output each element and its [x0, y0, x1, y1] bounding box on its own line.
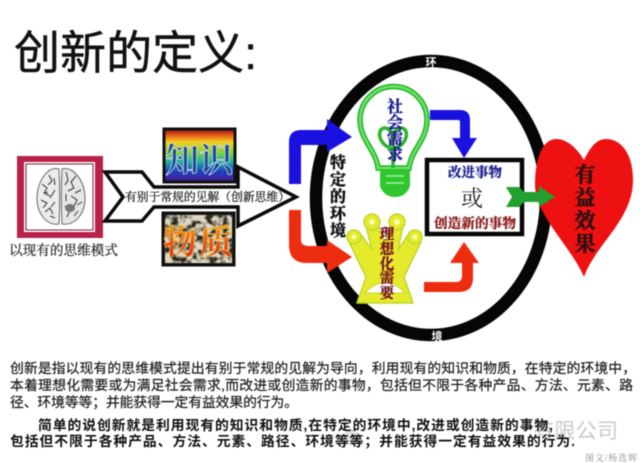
label: idealized need	[380, 226, 396, 302]
arrow: red to outcome box	[424, 242, 479, 292]
text block: simple definition: 简单的说创新就是利用现有的知识和物质,在特定的环境中,改进或创造新的事物,	[38, 417, 553, 433]
label: social demand: 会	[387, 113, 403, 132]
text block: definition: 径、环境等等；并能获得一定有益效果的行为。	[10, 394, 298, 411]
icon: light bulb with social demand	[360, 86, 427, 197]
label: specific environment: 环	[330, 205, 348, 223]
label: social demand: 社	[387, 98, 403, 116]
text block: definition	[10, 360, 636, 411]
panel: knowledge: 知识	[165, 142, 236, 180]
label: idealized need: 要	[380, 285, 395, 302]
label: social demand: 需	[387, 129, 403, 148]
arrow: blue input	[289, 119, 352, 184]
arrow: differentiated insight: 有别于常规的见解（创新思维）	[125, 190, 290, 204]
title: 创新的定义:	[14, 27, 257, 79]
icon: heart with beneficial effect	[535, 139, 633, 277]
text block: definition: 创新是指以现有的思维模式提出有别于常规的见解为导向，利用现有的知识和物质，在特定的环境中，	[10, 360, 636, 376]
panel: knowledge	[164, 129, 236, 182]
icon: crown with idealized need	[347, 214, 422, 303]
label: specific environment: 的	[330, 188, 346, 206]
arrow: green to heart	[506, 186, 555, 207]
arrow: differentiated insight	[105, 167, 296, 226]
panel: improve or create things: 或	[461, 186, 483, 211]
label: social demand	[387, 98, 403, 164]
panel: improve or create things	[427, 160, 522, 234]
label: idealized need: 需	[380, 269, 395, 287]
label: beneficial effect: 有	[574, 163, 596, 187]
label: specific environment: 境	[330, 222, 346, 240]
arrow: red input	[289, 210, 352, 273]
label: specific environment	[330, 153, 348, 240]
label: idealized need: 理	[380, 226, 395, 243]
label: beneficial effect: 果	[574, 232, 596, 256]
label: specific environment: 特	[330, 153, 346, 172]
ring: specific environment: 境	[432, 329, 442, 343]
text block: simple definition	[10, 417, 575, 450]
label: idealized need: 想	[380, 240, 396, 258]
label: beneficial effect	[574, 163, 596, 256]
label: beneficial effect: 效	[574, 209, 596, 233]
watermark: company name	[344, 420, 618, 445]
credit: 图文/杨选辉	[585, 452, 637, 463]
caption: existing thinking mode: 以现有的思维模式	[9, 242, 118, 258]
label: beneficial effect: 益	[574, 186, 596, 210]
panel: material: 物质	[163, 224, 233, 262]
watermark: company name: 有限公司	[533, 420, 618, 443]
arrow: blue to outcome box	[430, 110, 477, 158]
text block: simple definition: 包括但不限于各种产品、方法、元素、路径、环境等等；并能获得一定有益效果的行为.	[10, 433, 575, 450]
ring: specific environment	[316, 56, 546, 343]
panel: improve or create things: 改进事物	[448, 164, 502, 180]
ring: specific environment: 环	[426, 56, 436, 69]
label: idealized need: 化	[380, 256, 395, 273]
panel: improve or create things: 创造新的事物	[434, 215, 516, 231]
text block: definition: 本着理想化需要或为满足社会需求,而改进或创造新的事物，包括但不限于各种产品、方法、元素、路	[10, 377, 633, 393]
label: specific environment: 定	[330, 171, 346, 189]
panel: existing thinking mode	[9, 156, 118, 258]
label: social demand: 求	[387, 146, 403, 164]
icon: brain in crimson frame	[17, 156, 103, 238]
